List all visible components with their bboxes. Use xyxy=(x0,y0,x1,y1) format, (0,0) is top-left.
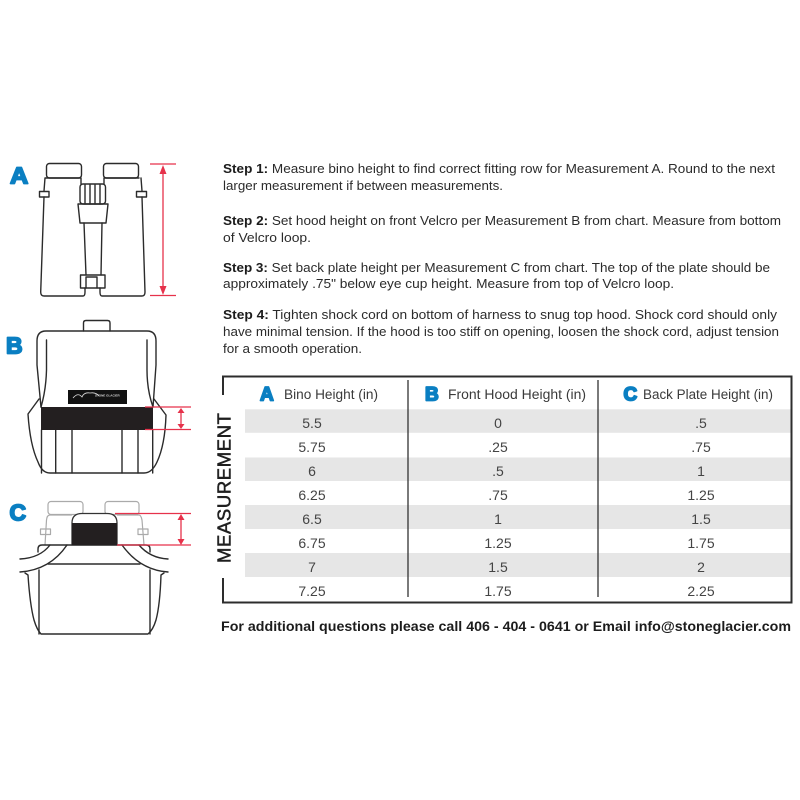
step 3 xyxy=(223,260,770,291)
column dividers xyxy=(408,380,598,597)
front hood height values xyxy=(484,415,512,599)
step 1 xyxy=(223,161,775,193)
logo patch: STONE GLACIER xyxy=(95,394,120,398)
measurement chart table xyxy=(214,376,792,602)
step 2 xyxy=(223,213,781,245)
label C: C xyxy=(10,500,26,526)
table frame xyxy=(223,376,792,602)
front hood height values: 1 xyxy=(494,511,502,527)
back plate height values: 1 xyxy=(697,463,705,479)
vertical axis label: MEASUREMENT xyxy=(214,413,234,563)
step 4: Step 4: Tighten shock cord on bottom of harness to snug top hood. Shock cord should only xyxy=(223,307,778,322)
front hood height values: 1.25 xyxy=(484,535,512,551)
bino height values: 6 xyxy=(308,463,316,479)
logo patch xyxy=(68,390,127,404)
step 4: have minimal tension. If the hood is too stiff on opening, loosen the shock cord, adjust tension xyxy=(223,324,779,339)
front hood height values: .75 xyxy=(488,487,508,503)
top hood xyxy=(72,514,117,545)
bino height values: 6.25 xyxy=(298,487,326,503)
back plate height values: 2.25 xyxy=(687,583,715,599)
black velcro band xyxy=(41,407,153,430)
back plate height values: 2 xyxy=(697,559,705,575)
contact footer: For additional questions please call 406 - 404 - 0641 or Email info@stoneglacier.com xyxy=(221,618,791,634)
step 3: approximately .75" below eye cup height. Measure from top of Velcro loop. xyxy=(223,276,674,291)
bino height values: 6.5 xyxy=(302,511,322,527)
front hood height values: .5 xyxy=(492,463,504,479)
back plate height values: 1.25 xyxy=(687,487,715,503)
back plate height values: .75 xyxy=(691,439,711,455)
back plate height values xyxy=(687,415,715,599)
column header B: Front Hood Height (in) xyxy=(448,387,586,402)
bino height values: 5.5 xyxy=(302,415,322,431)
front hood height values: 1.75 xyxy=(484,583,512,599)
step 1: Step 1: Measure bino height to find correct fitting row for Measurement A. Round to the next xyxy=(223,161,775,176)
diagram B: hood front view xyxy=(28,320,191,473)
diagram C: back plate view xyxy=(20,502,191,634)
bino height values: 7 xyxy=(308,559,316,575)
red height arrow xyxy=(150,164,176,296)
step 1: larger measurement if between measurements. xyxy=(223,178,503,193)
hood outline xyxy=(28,320,166,473)
front hood height values: 1.5 xyxy=(488,559,508,575)
column header B: B xyxy=(425,384,439,406)
bino height values: 7.25 xyxy=(298,583,326,599)
step 2: Step 2: Set hood height on front Velcro per Measurement B from chart. Measure from bottom xyxy=(223,213,781,228)
column header B xyxy=(425,384,586,406)
harness and body outline xyxy=(20,545,168,634)
step 4 xyxy=(223,307,779,356)
column header A: Bino Height (in) xyxy=(284,387,378,402)
front hood height values: .25 xyxy=(488,439,508,455)
bino height values: 5.75 xyxy=(298,439,326,455)
column header A: A xyxy=(260,384,274,406)
step 2: of Velcro loop. xyxy=(223,230,311,245)
column header C xyxy=(624,384,773,406)
column header C: Back Plate Height (in) xyxy=(643,387,773,402)
back plate height values: .5 xyxy=(695,415,707,431)
column header A xyxy=(260,384,378,406)
binocular outline xyxy=(40,164,146,296)
label A: A xyxy=(10,164,28,189)
bino height values xyxy=(298,415,326,599)
faded binoculars xyxy=(40,502,148,545)
front hood height values: 0 xyxy=(494,415,502,431)
red height arrow xyxy=(145,407,191,430)
row shading xyxy=(245,409,791,577)
bino height values: 6.75 xyxy=(298,535,326,551)
column header C: C xyxy=(624,384,638,406)
step 3: Step 3: Set back plate height per Measurement C from chart. The top of the plate should be xyxy=(223,260,770,275)
label B: B xyxy=(6,332,23,358)
back plate height values: 1.5 xyxy=(691,511,711,527)
diagram A: binoculars with height measurement xyxy=(40,164,176,296)
step 4: for a smooth operation. xyxy=(223,341,362,356)
back plate height values: 1.75 xyxy=(687,535,715,551)
red height arrow xyxy=(115,514,191,545)
